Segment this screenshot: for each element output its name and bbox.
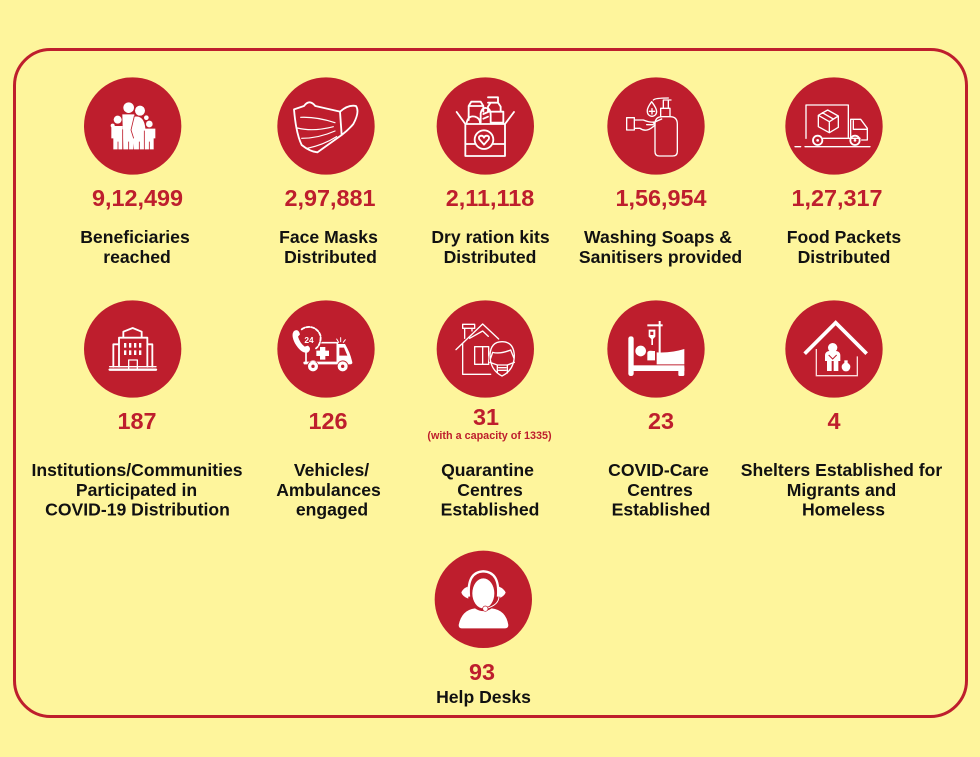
label: Sanitisers provided xyxy=(579,247,742,267)
capacity note: (with a capacity of 1335) xyxy=(427,430,552,442)
label: Help Desks xyxy=(436,687,531,707)
icon: sanitiser bottle xyxy=(607,77,705,175)
stat: shelters xyxy=(741,300,942,520)
number: 2,11,118 xyxy=(446,185,534,211)
label: Distributed xyxy=(798,247,890,267)
label: Established xyxy=(441,500,539,520)
icon: house with masked face xyxy=(437,300,534,398)
icon: shelter xyxy=(785,300,883,398)
label: reached xyxy=(103,247,171,267)
label: Institutions/Communities xyxy=(31,460,243,480)
number: 126 xyxy=(308,408,348,434)
icon: hospital bed xyxy=(607,300,705,398)
label: Vehicles/ xyxy=(294,460,369,480)
label: Washing Soaps & xyxy=(584,227,732,247)
label: Beneficiaries xyxy=(80,227,190,247)
icon: ration box xyxy=(437,77,534,175)
icon: ambulance xyxy=(277,300,375,398)
icon: delivery truck xyxy=(785,77,883,175)
number: 9,12,499 xyxy=(92,185,183,211)
stat: soaps and sanitisers xyxy=(579,77,742,267)
icon: mask xyxy=(277,77,375,175)
number: 93 xyxy=(469,659,495,685)
stat: vehicles xyxy=(276,300,381,520)
label: Shelters Established for xyxy=(741,460,942,480)
icon: building xyxy=(84,300,181,398)
label: Dry ration kits xyxy=(431,227,550,247)
number: 23 xyxy=(648,408,674,434)
stat: dry ration kits xyxy=(431,77,550,267)
label: Food Packets xyxy=(787,227,901,247)
label: Homeless xyxy=(802,500,885,520)
label: Face Masks xyxy=(279,227,378,247)
number: 4 xyxy=(827,408,841,434)
stat: help desks xyxy=(435,551,532,707)
stat: covid-care centres xyxy=(607,300,710,520)
label: Centres xyxy=(457,480,523,500)
label: engaged xyxy=(296,500,368,520)
label: Distributed xyxy=(284,247,377,267)
label: Distributed xyxy=(444,247,536,267)
stat: beneficiaries xyxy=(80,77,190,267)
label: Participated in xyxy=(76,480,197,500)
stat: face masks xyxy=(277,77,378,267)
icon: family xyxy=(84,77,181,175)
label: Migrants and xyxy=(787,480,896,500)
number: 2,97,881 xyxy=(284,185,376,211)
stat: food packets xyxy=(785,77,901,267)
label: Quarantine xyxy=(441,460,534,480)
label: Ambulances xyxy=(276,480,381,500)
stat: quarantine centres xyxy=(427,300,552,520)
number: 1,27,317 xyxy=(791,185,883,211)
label: COVID-Care xyxy=(608,460,709,480)
label: Centres xyxy=(627,480,693,500)
label: COVID-19 Distribution xyxy=(45,500,230,520)
number: 1,56,954 xyxy=(615,185,707,211)
label: Established xyxy=(612,500,710,520)
icon: headset agent xyxy=(435,551,532,648)
number: 187 xyxy=(117,408,157,434)
icon: ambulance: 24 xyxy=(304,335,314,345)
number: 31 xyxy=(473,404,499,430)
stat: institutions xyxy=(31,300,243,520)
